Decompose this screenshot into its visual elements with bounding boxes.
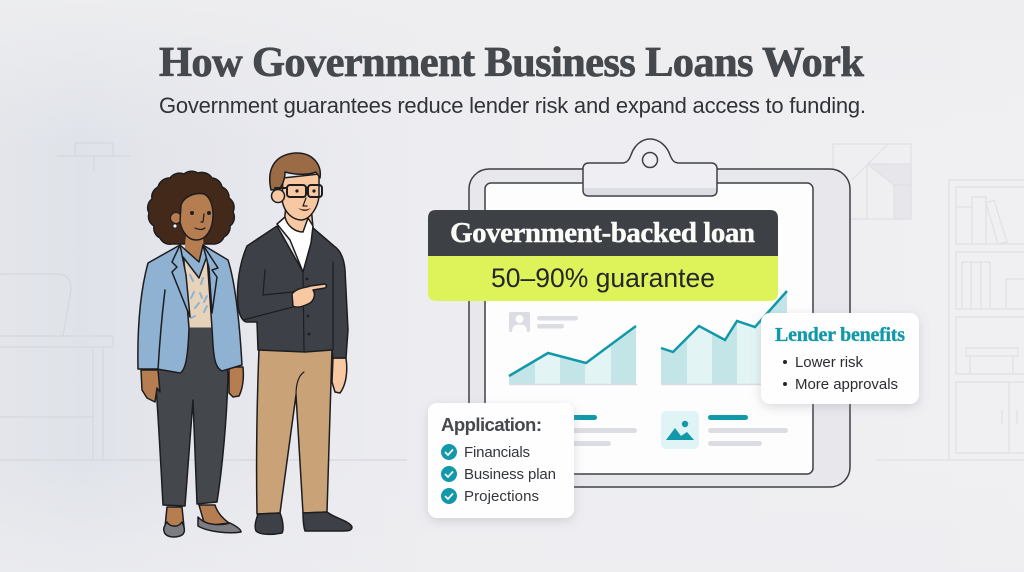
check item: projections: Projections	[464, 488, 539, 505]
woman: blouse	[184, 256, 212, 328]
woman: hair	[148, 171, 234, 244]
woman: face	[180, 193, 213, 240]
illustration: woman	[138, 171, 243, 537]
clipboard: clip	[583, 139, 717, 196]
placeholder text lines: image row	[708, 415, 788, 446]
card: lender benefits	[761, 313, 919, 404]
woman: nose and mouth	[195, 214, 205, 230]
clipboard	[469, 139, 850, 487]
bullet: lower risk: Lower risk	[795, 354, 864, 371]
man: hair	[270, 153, 320, 190]
icon: image placeholder	[661, 411, 699, 449]
man: trousers	[257, 349, 332, 514]
woman: shoes	[164, 517, 241, 537]
woman: trousers	[155, 327, 228, 506]
man: nose	[303, 198, 307, 206]
profile placeholder icon	[509, 312, 530, 332]
bullet: more approvals: More approvals	[795, 376, 898, 393]
subtitle: Government guarantees reduce lender risk and expand access to funding.	[159, 93, 866, 118]
woman: sleeve crease	[158, 290, 165, 370]
area chart: left	[509, 320, 637, 385]
clipboard: board	[469, 169, 850, 487]
illustration: man	[237, 153, 352, 534]
woman: earring	[173, 224, 177, 228]
man: cardigan details	[243, 262, 333, 351]
card: application	[428, 403, 574, 518]
woman: neck and chest	[184, 235, 204, 278]
clipboard: paper	[485, 183, 813, 474]
lender benefits heading: Lender benefits	[775, 324, 905, 346]
background office line art: right	[833, 144, 1024, 460]
banner: heading: Government-backed loan	[450, 217, 755, 249]
banner: government-backed loan	[428, 210, 778, 301]
check item: business plan: Business plan	[464, 466, 556, 483]
area chart: right	[661, 285, 788, 385]
man: ear	[272, 190, 284, 202]
woman: jacket	[138, 245, 242, 373]
woman: blouse pattern	[190, 275, 207, 318]
banner: lime band	[428, 256, 778, 301]
man: neck	[284, 205, 313, 235]
man: trouser fly	[296, 372, 304, 395]
placeholder lines beside application card	[560, 415, 637, 446]
background office line art: left	[0, 143, 407, 460]
man: left hand	[332, 358, 347, 393]
man: pointing hand	[292, 284, 326, 307]
woman: hands	[141, 367, 243, 402]
woman: lapels	[172, 245, 218, 317]
man: shoes	[255, 512, 352, 534]
placeholder text lines	[537, 316, 578, 328]
title: How Government Business Loans Work	[159, 39, 864, 86]
application heading: Application:	[441, 414, 542, 435]
woman: ear	[170, 212, 182, 224]
man: eyes	[295, 189, 316, 193]
woman: ankles and feet	[165, 505, 229, 527]
banner: dark band	[428, 210, 778, 256]
man: mouth	[298, 208, 311, 211]
banner: guarantee: 50–90% guarantee	[491, 263, 715, 293]
man: face	[282, 174, 319, 220]
man: glasses	[275, 185, 322, 197]
man: shirt and collar	[277, 217, 313, 272]
woman: facial features	[190, 211, 211, 215]
man: cardigan	[237, 226, 348, 358]
man: cardigan buttons	[306, 278, 310, 335]
check item: financials: Financials	[464, 444, 530, 461]
